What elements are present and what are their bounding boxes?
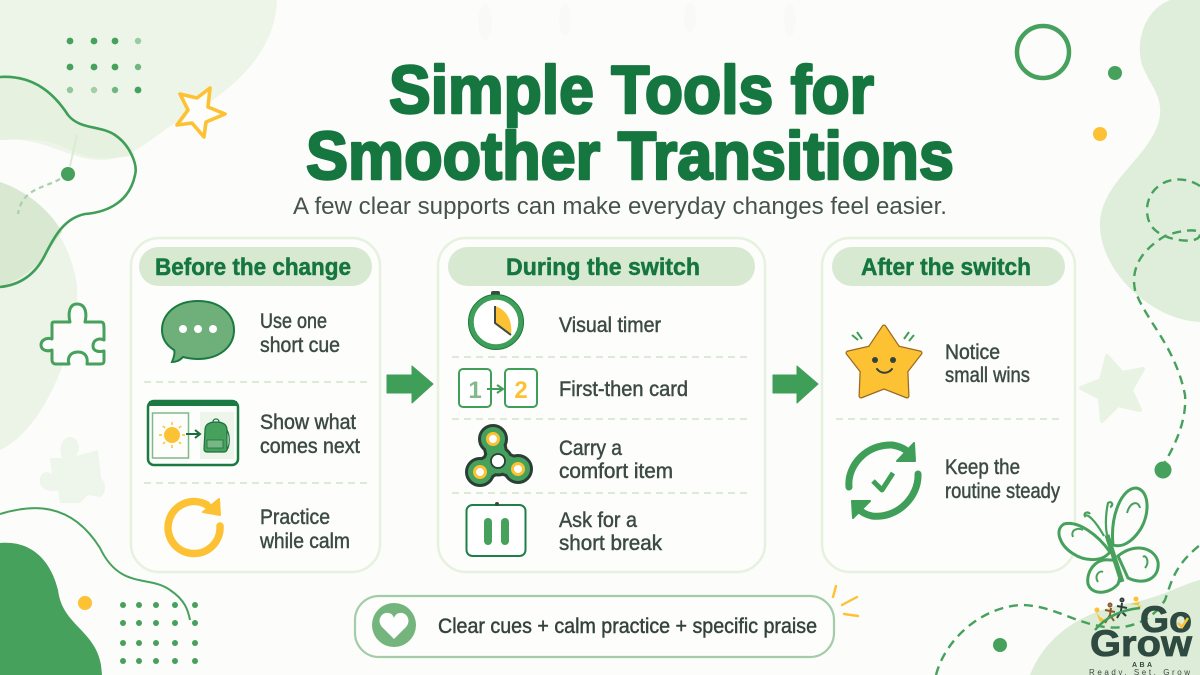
decoration: bottom dot bbox=[993, 638, 1007, 652]
decoration: yellow dot bbox=[78, 596, 92, 610]
title: Smoother Transitions bbox=[306, 118, 954, 194]
text: callout message: Clear cues + calm practice + specific praise bbox=[438, 615, 817, 638]
text: use one short cue: short cue bbox=[260, 334, 340, 357]
title: Simple Tools for bbox=[389, 52, 874, 128]
icon: what comes next card bbox=[148, 401, 238, 465]
text: keep the routine steady bbox=[945, 456, 1060, 503]
text: practice while calm bbox=[259, 506, 350, 553]
logo: go grow aba: Grow bbox=[1090, 623, 1192, 664]
background: left blob bbox=[0, 182, 77, 450]
icon: visual timer bbox=[468, 291, 524, 350]
decoration: top-left dot grid bbox=[67, 38, 141, 93]
icon: faint puzzle bbox=[40, 437, 105, 503]
text: keep the routine steady: routine steady bbox=[945, 480, 1060, 503]
arrow: during to after bbox=[773, 366, 818, 403]
text: notice small wins bbox=[945, 341, 1030, 387]
text: first-then card: First-then card bbox=[559, 378, 688, 401]
text: carry a comfort item: comfort item bbox=[559, 460, 673, 483]
heading: before the change: Before the change bbox=[155, 254, 351, 281]
icon: pause card bbox=[466, 502, 526, 556]
text: practice while calm: while calm bbox=[259, 530, 350, 553]
background: upper-left inner tint bbox=[0, 77, 134, 158]
heading: after the switch bbox=[832, 247, 1065, 286]
text: notice small wins: small wins bbox=[945, 364, 1030, 387]
arrow: before to during bbox=[387, 366, 433, 403]
text: show what comes next: comes next bbox=[260, 435, 360, 458]
title bbox=[306, 52, 954, 194]
text: show what comes next bbox=[260, 411, 360, 458]
decoration: left dot with dashed trail bbox=[18, 135, 77, 214]
icon: first-then card bbox=[459, 369, 537, 407]
background: bottom-left green blob bbox=[0, 543, 102, 675]
icon: puzzle outline bbox=[41, 304, 104, 364]
icon: yellow star outline bbox=[177, 88, 225, 137]
text: ask for a short break: Ask for a bbox=[559, 509, 637, 532]
text: keep the routine steady: Keep the bbox=[945, 456, 1020, 479]
background: top-right blob bbox=[1100, 0, 1200, 322]
decoration: left wavy outline bbox=[0, 77, 136, 287]
icon: butterfly bbox=[1059, 488, 1158, 592]
icon: heart bbox=[372, 603, 416, 647]
icon: fidget spinner bbox=[466, 424, 532, 486]
icon: yellow circular arrow bbox=[168, 499, 220, 554]
text: notice small wins: Notice bbox=[945, 341, 1000, 364]
background: left blob darker area bbox=[0, 182, 62, 287]
logo: go grow aba: Go bbox=[1140, 599, 1192, 640]
icon: speech bubble bbox=[162, 301, 234, 362]
logo: go grow aba bbox=[1089, 596, 1192, 675]
logo: go grow aba: ABA bbox=[1132, 662, 1152, 669]
decoration: lower-left curve bbox=[0, 508, 190, 620]
heading: during the switch bbox=[448, 247, 755, 286]
decoration: bottom dashed path bbox=[936, 545, 1200, 675]
decoration: right dashed loop path bbox=[1134, 179, 1200, 462]
icon: yellow sparks bbox=[833, 586, 858, 616]
heading: during the switch: During the switch bbox=[506, 254, 700, 281]
callout: summary pill bbox=[355, 596, 834, 657]
icon: faint star bbox=[1081, 356, 1143, 421]
icon: smiling star bbox=[848, 327, 920, 396]
text: use one short cue bbox=[260, 310, 340, 357]
background: top-left blob bbox=[0, 0, 277, 160]
decoration: dot on dashed path bbox=[1154, 462, 1172, 478]
panel: after the switch bbox=[822, 238, 1075, 572]
decoration: green dot bbox=[1108, 66, 1122, 80]
text: carry a comfort item bbox=[559, 437, 673, 483]
panel: during the switch bbox=[438, 238, 765, 572]
heading: after the switch: After the switch bbox=[861, 254, 1031, 281]
text: show what comes next: Show what bbox=[260, 411, 356, 434]
text: use one short cue: Use one bbox=[260, 310, 327, 333]
text: visual timer: Visual timer bbox=[559, 314, 661, 337]
subtitle: A few clear supports can make everyday changes feel easier. bbox=[293, 193, 947, 220]
icon: routine refresh check bbox=[849, 443, 918, 518]
text: carry a comfort item: Carry a bbox=[559, 437, 622, 460]
text: ask for a short break bbox=[559, 509, 662, 555]
text: practice while calm: Practice bbox=[260, 506, 330, 529]
decoration: ring bbox=[1017, 26, 1069, 78]
background: faint top shapes bbox=[478, 3, 796, 40]
decoration: yellow dot right bbox=[1093, 127, 1107, 141]
text: ask for a short break: short break bbox=[559, 532, 662, 555]
decoration: bottom-left dot grid bbox=[120, 602, 198, 664]
icon: first-then card: 1 bbox=[468, 377, 482, 404]
heading: before the change bbox=[139, 247, 372, 286]
icon: first-then card: 2 bbox=[514, 377, 528, 404]
background: bottom-right blob bbox=[1030, 580, 1200, 675]
panel: before the change bbox=[131, 238, 380, 572]
